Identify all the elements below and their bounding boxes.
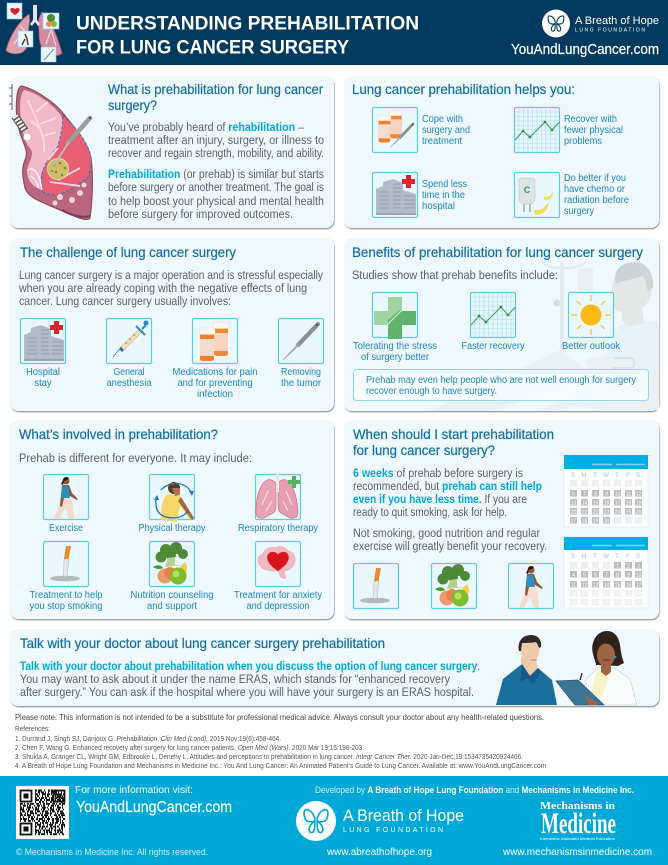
calendar: second month: 13 <box>593 582 598 588</box>
item: medications <box>172 318 258 400</box>
item: exercise: Exercise <box>49 523 83 534</box>
calendar: first month: 3 <box>616 482 619 488</box>
calendar: first month: 23 <box>604 510 609 516</box>
calendar: first month: 28 <box>582 518 587 524</box>
item: stop smoking <box>30 542 103 612</box>
panel: benefits <box>344 238 659 411</box>
calendar: first month: 11 <box>626 492 631 498</box>
item: recover: problems <box>564 136 602 147</box>
heading <box>108 82 323 113</box>
text: lifestyle <box>353 526 547 553</box>
calendar: second month: 5 <box>583 572 586 578</box>
heading: Lung cancer prehabilitation helps you: <box>352 82 575 97</box>
calendar: first month: 14 <box>582 500 587 506</box>
text: lifestyle: exercise will greatly benefit your recovery. <box>353 539 547 553</box>
body text: cancer. Lung cancer surgery usually involves: <box>19 294 231 308</box>
calendar: first month: 19 <box>636 500 641 506</box>
body text: You may want to ask about it under the name ERAS, which stands for “enhanced recovery <box>20 672 451 686</box>
text: prehabilitation definition: before surgery or another treatment. The goal is <box>108 180 324 194</box>
body text: when you are already coping with the negative effects of lung <box>18 281 307 295</box>
calendar: second month: 31 <box>636 600 641 606</box>
calendar: second month: 4 <box>572 572 575 578</box>
icon: nutrition <box>432 564 476 608</box>
item: anxiety and depression: and depression <box>246 601 310 612</box>
icon: exercise <box>508 564 554 608</box>
QR code <box>16 786 69 839</box>
references: 2. Chen F, Wang G. Enhanced recovery after surgery for lung cancer patients. Open Med (Wars). 2020 Mar 19;15:198-203. <box>15 743 364 752</box>
item: general anesthesia: anesthesia <box>106 378 152 389</box>
text: timing <box>353 466 542 519</box>
item: hospital stay: stay <box>34 378 52 389</box>
heading: When should I start prehabilitation <box>353 427 554 442</box>
lead-in text: Prehab is different for everyone. It may include: <box>19 451 252 465</box>
text: timing: even if you have less time. If you are <box>353 492 527 506</box>
item: general anesthesia <box>106 318 152 389</box>
text: prehabilitation definition <box>108 167 324 221</box>
references: 3. Shukla A, Granger CL, Wright GM, Edbrooke L, Denehy L. Attitudes and perceptions to prehabilitation in lung cancer. Integr Cancer Ther. 2020 Jan-Dec;19:1534735420924466. <box>15 752 523 761</box>
item: cope with surgery <box>372 108 470 152</box>
icon: no smoking <box>354 564 398 608</box>
calendar: second month: 26 <box>582 600 587 606</box>
calendar: second month: 12 <box>582 582 587 588</box>
calendar: first month: W <box>603 473 609 479</box>
item: respiratory therapy <box>238 474 318 534</box>
text: rehabilitation definition: treatment after an injury, surgery, or illness to <box>108 133 324 147</box>
item: stop smoking: Treatment to help <box>30 590 103 601</box>
panel: what's involved <box>10 420 334 619</box>
calendar: first month: 4 <box>627 482 630 488</box>
item: chemo or radiation: C <box>524 185 531 195</box>
logo: A Breath of Hope foundation: A Breath of Hope <box>343 807 464 825</box>
calendar: second month: 22 <box>615 592 620 598</box>
item: faster recovery: Faster recovery <box>462 341 525 352</box>
calendar: second month: F <box>626 554 630 560</box>
logo: A Breath of Hope: A Breath of Hope <box>575 15 659 27</box>
heading: The challenge of lung cancer surgery <box>20 245 236 260</box>
calendar: first month: S <box>636 473 640 479</box>
calendar: second month: 8 <box>616 572 619 578</box>
calendar: second month: 23 <box>626 592 631 598</box>
visit text: YouAndLungCancer.com <box>76 799 232 816</box>
item: less hospital time: hospital <box>422 201 455 212</box>
calendar: second month: 24 <box>636 592 641 598</box>
body text: after surgery.” You can ask if the hospital where you will have your surgery is an ERAS hospital. <box>20 685 474 699</box>
text: timing: 6 weeks of prehab before surgery is <box>353 466 523 480</box>
item: chemo or radiation: have chemo or <box>564 184 626 195</box>
calendar: first month: 13 <box>571 500 576 506</box>
heading: for lung cancer surgery? <box>353 443 495 458</box>
item: removing the tumor: Removing <box>281 367 321 378</box>
item: less hospital time: Spend less <box>422 179 467 190</box>
calendar: second month: 14 <box>604 582 609 588</box>
references: 1. Durrand J, Singh SJ, Danjoux G. Prehabilitation. Clin Med (Lond). 2019 Nov;19(6):458-464. <box>15 734 281 743</box>
text: prehabilitation definition: before surgery for improved outcomes. <box>108 207 293 221</box>
text: rehabilitation definition: recover and regain strength, mobility, and ability. <box>108 146 324 160</box>
calendar: second month: W <box>603 554 609 560</box>
calendar: first month: T <box>615 473 619 479</box>
logo: A Breath of Hope <box>542 10 659 38</box>
calendar: second month: 3 <box>637 564 640 570</box>
footer <box>0 776 668 865</box>
text: prehabilitation definition: to help boost your physical and mental health <box>108 194 324 208</box>
item: tolerating stress <box>353 292 437 363</box>
text: lifestyle: Not smoking, good nutrition and regular <box>353 526 540 540</box>
calendar: first month: 16 <box>604 500 609 506</box>
item: physical therapy: Physical therapy <box>138 523 206 534</box>
calendar: second month: 16 <box>626 582 631 588</box>
callout: recover enough to have surgery. <box>366 386 497 397</box>
body text <box>20 659 480 699</box>
calendar: second month: 20 <box>593 592 598 598</box>
calendar: first month: M <box>582 473 586 479</box>
item: nutrition: Nutrition counseling <box>130 590 214 601</box>
item: less hospital time <box>372 172 467 218</box>
item: chemo or radiation: Do better if you <box>564 173 626 184</box>
calendar: second month: 28 <box>604 600 609 606</box>
item: medications: infection <box>197 389 233 400</box>
body text <box>18 268 324 308</box>
title: FOR LUNG CANCER SURGERY <box>76 36 349 58</box>
item: hospital stay <box>20 318 66 389</box>
item: cope with surgery: surgery and <box>422 125 470 136</box>
item: recover: Recover with <box>564 114 617 125</box>
item: physical therapy <box>138 474 206 534</box>
calendar: first month: 15 <box>593 500 598 506</box>
item: cope with surgery: treatment <box>422 136 462 147</box>
calendar: first month: 24 <box>615 510 620 516</box>
copyright: © Mechanisms in Medicine Inc. All rights reserved. <box>16 847 208 857</box>
panel: talk with your doctor <box>10 629 659 706</box>
heading: Talk with your doctor about lung cancer surgery prehabilitation <box>20 636 385 651</box>
panel: when should I start <box>344 420 659 619</box>
disclaimer note: Please note: This information is not intended to be a substitute for professional medical advice. Always consult your doctor about any health-related questions. <box>15 713 544 722</box>
item: stop smoking: you stop smoking <box>30 601 102 612</box>
calendar: second month: 25 <box>571 600 576 606</box>
item: cope with surgery: Cope with <box>422 114 463 125</box>
calendar: second month: 17 <box>636 582 641 588</box>
title: UNDERSTANDING PREHABILITATION <box>76 12 419 34</box>
item: general anesthesia: General <box>114 367 144 378</box>
item: tolerating stress: Tolerating the stress <box>353 341 437 352</box>
calendar: second month: 10 <box>636 572 641 578</box>
text: timing: ready to quit smoking, ask for help. <box>353 505 507 519</box>
calendar: first month: 21 <box>582 510 587 516</box>
calendar: second month: 19 <box>582 592 587 598</box>
logo: A Breath of Hope: LUNG FOUNDATION <box>575 28 645 34</box>
logo: A Breath of Hope foundation: LUNG FOUNDATION <box>343 827 443 834</box>
visit text: For more information visit: <box>75 785 193 796</box>
calendar: first month: S <box>571 473 575 479</box>
item: recover: fewer physical <box>564 125 623 136</box>
panel: what is prehabilitation <box>9 76 334 228</box>
item: removing the tumor: the tumor <box>281 378 322 389</box>
calendar: first month: 10 <box>615 492 620 498</box>
body text: Talk with your doctor about prehabilitation when you discuss the option of lung cancer surgery. <box>20 659 480 673</box>
visit text <box>75 785 232 816</box>
item: anxiety and depression: Treatment for anxiety <box>234 590 322 601</box>
heading: surgery? <box>108 98 157 113</box>
references: References: <box>15 724 50 733</box>
calendar: second month: 30 <box>626 600 631 606</box>
item: chemo or radiation: surgery <box>564 206 594 217</box>
calendar: first month: 5 <box>637 482 640 488</box>
calendar: second month: 18 <box>571 592 576 598</box>
calendar: first month: 17 <box>615 500 620 506</box>
logo: Mechanisms in Medicine <box>540 800 616 841</box>
item: chemo or radiation <box>514 172 629 218</box>
item: better outlook <box>562 292 620 352</box>
item: respiratory therapy: Respiratory therapy <box>238 523 318 534</box>
calendar: second month: 9 <box>627 572 630 578</box>
text: rehabilitation definition: You’ve probably heard of rehabilitation – <box>108 120 304 134</box>
calendar: first month: 27 <box>571 518 576 524</box>
url: abreathofhope: www.abreathofhope.org <box>326 847 432 858</box>
callout <box>354 370 648 400</box>
text: prehabilitation definition: Prehabilitation (or prehab) is similar but starts <box>108 167 324 181</box>
calendar: first month: 2 <box>605 482 608 488</box>
item: tolerating stress: of surgery better <box>361 352 430 363</box>
logo: Mechanisms in Medicine: Mechanisms in <box>540 800 615 812</box>
calendar: second month: 11 <box>571 582 576 588</box>
text: rehabilitation definition <box>108 120 324 160</box>
item: medications: Medications for pain <box>172 367 258 378</box>
illustration: faint patient with IV pole <box>430 260 659 411</box>
item: hospital stay: Hospital <box>26 367 60 378</box>
calendar: second month: 21 <box>604 592 609 598</box>
calendar: first month: 18 <box>626 500 631 506</box>
calendar: first month: 12 <box>636 492 641 498</box>
calendar: first month: 30 <box>604 518 609 524</box>
lead-in text: Studies show that prehab benefits include: <box>352 268 558 282</box>
calendar: second month: 6 <box>594 572 597 578</box>
panel: the challenge <box>10 238 334 411</box>
calendar: second month: 15 <box>615 582 620 588</box>
calendar: second month: S <box>636 554 640 560</box>
calendar: first month: F <box>626 473 630 479</box>
item: removing the tumor <box>278 318 324 389</box>
item: recover <box>514 108 623 152</box>
calendar: second month: 27 <box>593 600 598 606</box>
heading: What is prehabilitation for lung cancer <box>108 82 323 97</box>
header banner <box>0 0 668 65</box>
calendar: second month: 1 <box>616 564 619 570</box>
text: timing: recommended, but prehab can still help <box>353 479 542 493</box>
calendar: first month: 6 <box>572 492 575 498</box>
item: exercise <box>44 474 88 534</box>
calendar: first month: 20 <box>571 510 576 516</box>
calendar: first month: 8 <box>594 492 597 498</box>
calendar: second month: T <box>593 554 597 560</box>
item: medications: and for preventing <box>178 378 252 389</box>
illustration: patient and doctor <box>496 631 637 705</box>
item: chemo or radiation: radiation before <box>564 195 629 206</box>
calendar: first month <box>564 455 648 527</box>
title <box>76 12 419 58</box>
logo: A Breath of Hope foundation <box>296 801 464 841</box>
calendar: first month: 7 <box>583 492 586 498</box>
references <box>15 724 546 770</box>
calendar: second month: M <box>582 554 586 560</box>
icon: header lungs with thumbnails <box>6 3 62 62</box>
item: nutrition: and support <box>147 601 197 612</box>
calendar: first month: 26 <box>636 510 641 516</box>
logo: Mechanisms in Medicine: Medicine <box>541 807 616 840</box>
illustration: lung with scalpel <box>9 84 92 219</box>
heading: What’s involved in prehabilitation? <box>19 427 218 442</box>
calendar: second month: 7 <box>605 572 608 578</box>
calendar: second month: T <box>615 554 619 560</box>
calendar: first month: 22 <box>593 510 598 516</box>
calendar: first month: T <box>593 473 597 479</box>
heading <box>353 427 554 458</box>
logo: Mechanisms in Medicine: Interactive Animated Medical Education <box>540 836 615 841</box>
calendar: first month: 25 <box>626 510 631 516</box>
panel: prehabilitation helps you <box>344 76 659 228</box>
references: 4. A Breath of Hope Lung Foundation and Mechanisms in Medicine Inc.: You And Lung Cancer: An Animated Patient’s Guide to Lung Cancer. Available at: www.YouAndLungCancer.com <box>15 761 546 770</box>
developed by: Developed by A Breath of Hope Lung Foundation and Mechanisms in Medicine Inc. <box>315 785 634 795</box>
calendar: second month: S <box>571 554 575 560</box>
calendar: second month <box>564 537 648 608</box>
calendar: second month: 2 <box>627 564 630 570</box>
item: nutrition <box>130 542 214 612</box>
callout: Prehab may even help people who are not well enough for surgery <box>366 375 636 386</box>
heading: Benefits of prehabilitation for lung cancer surgery <box>352 245 643 260</box>
item: less hospital time: time in the <box>422 190 465 201</box>
item: faster recovery <box>462 292 525 352</box>
url: mechanismsinmedicine: www.mechanismsinmedicine.com <box>502 847 652 858</box>
calendar: first month: 1 <box>594 482 597 488</box>
item: better outlook: Better outlook <box>562 341 620 352</box>
calendar: first month: 29 <box>593 518 598 524</box>
item: anxiety and depression <box>234 542 322 612</box>
body text: Lung cancer surgery is a major operation and is stressful especially <box>19 268 324 282</box>
calendar: second month: 29 <box>615 600 620 606</box>
calendar: first month: 9 <box>605 492 608 498</box>
